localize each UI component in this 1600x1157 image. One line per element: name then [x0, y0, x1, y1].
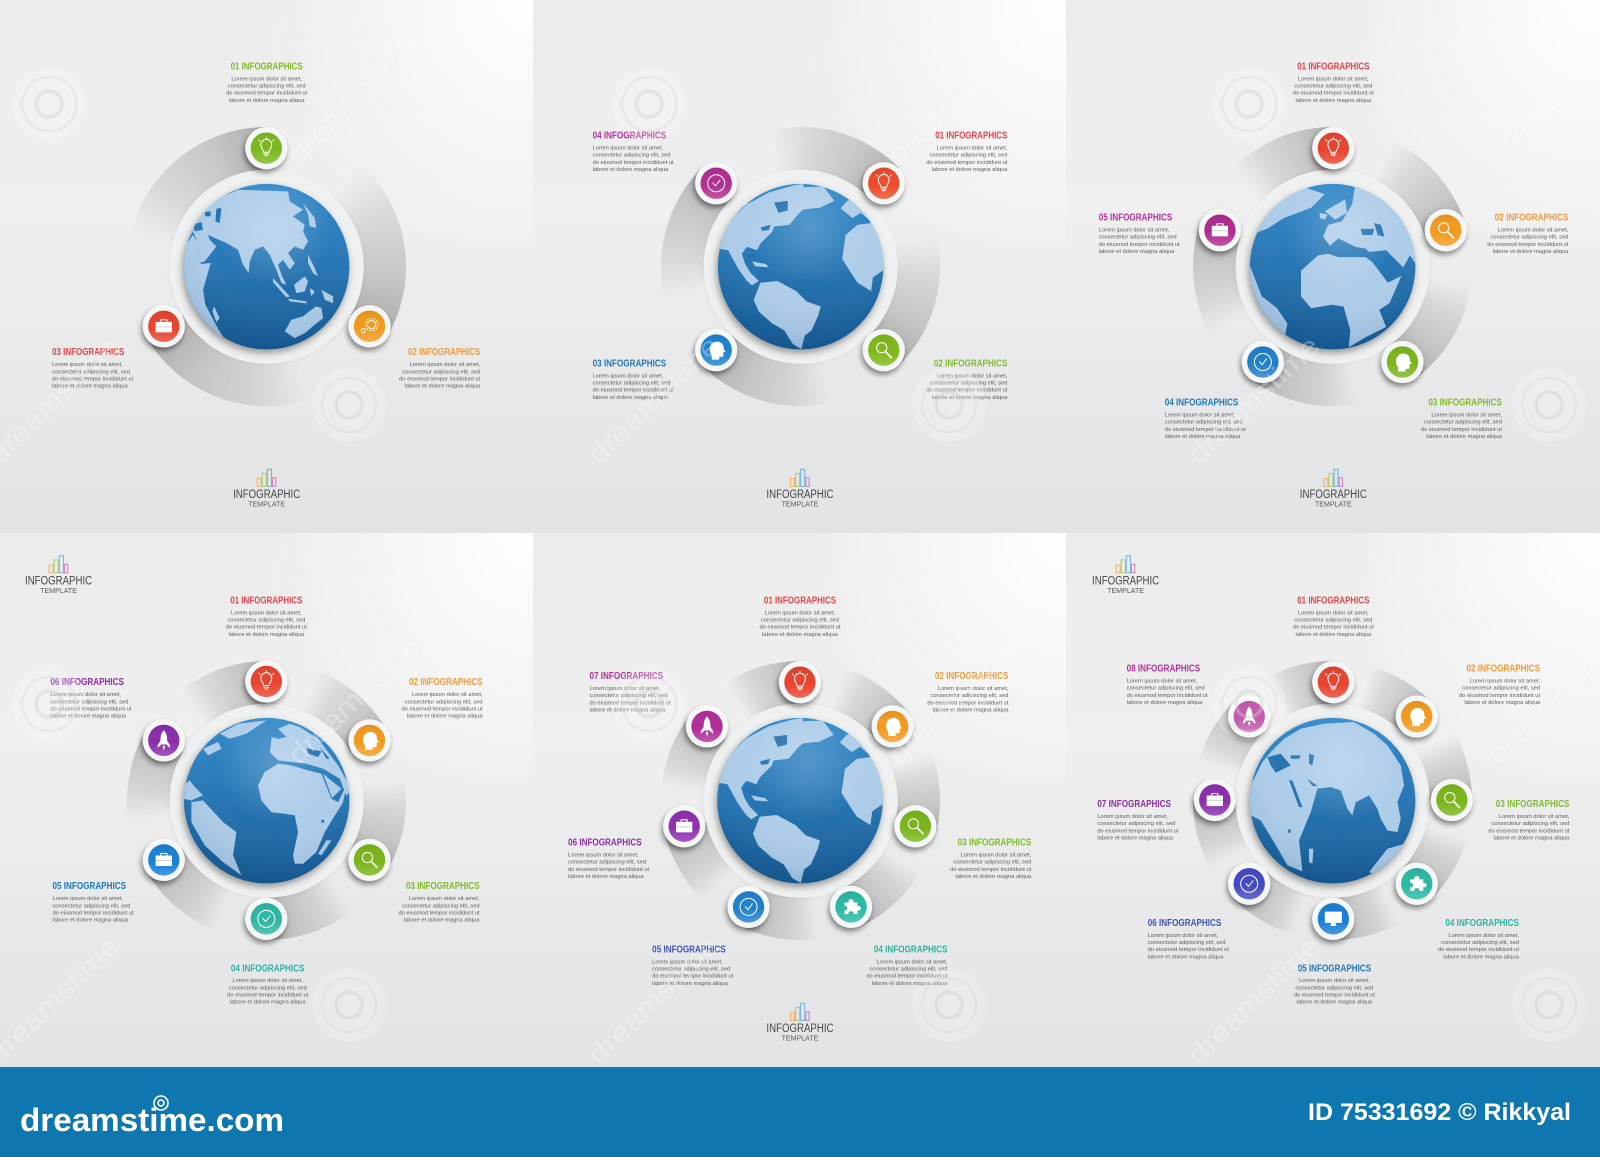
text: 03 — [52, 347, 134, 390]
footer band — [0, 1067, 1600, 1157]
text: 03 — [1421, 398, 1503, 440]
logo: TEMPLATE — [1107, 586, 1144, 595]
text: 04: do eiusmod tempor incididunt ut — [1165, 427, 1246, 433]
text: 04: Lorem ipsum dolor sit amet, — [593, 146, 664, 152]
node: 03 magnifier — [894, 805, 937, 847]
text: 03: 03 INFOGRAPHICS — [1496, 799, 1570, 810]
text: 04: do eiusmod tempor incididunt ut — [593, 160, 674, 166]
text: 06: do eiusmod tempor incididunt ut — [568, 867, 650, 873]
text: 07: labore et dolore magna aliqua — [590, 707, 666, 713]
ring band — [661, 661, 940, 940]
text: 04: 04 INFOGRAPHICS — [1165, 398, 1239, 409]
footer logo: dreamstime.com — [20, 1102, 284, 1138]
text: 05: 05 INFOGRAPHICS — [1099, 213, 1173, 224]
node: 08 rocket — [1228, 695, 1270, 738]
logo: INFOGRAPHIC — [1300, 489, 1367, 501]
text: 05: labore et dolore magna aliqua — [52, 918, 129, 924]
text: 05: consectetur adipiscing elit, sed — [1099, 235, 1177, 241]
text: 03: consectetur adipiscing elit, sed — [1424, 420, 1502, 426]
text: 01: labore et dolore magna aliqua — [932, 167, 1008, 173]
text: 03: labore et dolore magna aliqua — [593, 395, 669, 401]
text: 04: labore et dolore magna aliqua — [872, 981, 948, 987]
text: 02: 02 INFOGRAPHICS — [934, 358, 1008, 369]
text: 02 — [399, 347, 481, 390]
text: 08: 08 INFOGRAPHICS — [1127, 664, 1201, 675]
text: 06: do eiusmod tempor incididunt ut — [1148, 947, 1229, 953]
text: 02 — [1487, 213, 1569, 255]
node: 03 magnifier — [348, 839, 391, 881]
text: 01: Lorem ipsum dolor sit amet, — [1298, 76, 1369, 82]
ring band — [127, 127, 406, 406]
text: 07: labore et dolore magna aliqua — [1097, 835, 1174, 841]
text: 04: consectetur adipiscing elit, sed — [229, 985, 307, 991]
logo: TEMPLATE — [40, 586, 77, 595]
text: 04: 04 INFOGRAPHICS — [231, 963, 305, 974]
text: 02: Lorem ipsum dolor sit amet, — [1469, 678, 1540, 684]
text: 02: Lorem ipsum dolor sit amet, — [937, 373, 1008, 379]
node: 03 briefcase — [143, 305, 185, 347]
text: 05: Lorem ipsum dolor sit amet, — [1299, 978, 1370, 984]
text: 01 — [926, 131, 1008, 173]
node: 05 clock — [727, 886, 770, 928]
text: 01 — [1293, 61, 1374, 104]
text: 01: 01 INFOGRAPHICS — [1297, 61, 1370, 72]
text: 02 — [402, 677, 483, 720]
node: 03 head — [1381, 341, 1424, 383]
text: 07: do eiusmod tempor incididunt ut — [590, 700, 671, 706]
node: 06 clock — [1228, 863, 1270, 905]
text: 01: labore et dolore magna aliqua — [1296, 98, 1372, 104]
text: 03: do eiusmod tempor incididunt ut — [1488, 828, 1570, 834]
panel: three-item globe infographic — [0, 0, 533, 534]
text: 01: consectetur adipiscing elit, sed — [228, 84, 306, 90]
globe: Americas — [718, 184, 885, 349]
text: 03: Lorem ipsum dolor sit amet, — [1499, 814, 1570, 820]
text: 01: labore et dolore magna aliqua — [229, 98, 305, 104]
watermark overlay: dreamstime — [882, 30, 1025, 170]
node: 02 gear — [348, 305, 391, 347]
text: 04: labore et dolore magna aliqua — [1165, 434, 1241, 440]
text: 01: do eiusmod tempor incididunt ut — [226, 625, 307, 631]
node: 05 briefcase — [1199, 209, 1241, 251]
text: 01: Lorem ipsum dolor sit amet, — [231, 610, 302, 616]
text: 02 — [927, 671, 1009, 713]
node: 04 clock — [1242, 341, 1284, 383]
text: 06: labore et dolore magna aliqua — [1148, 954, 1224, 960]
text: 03 — [1488, 799, 1570, 841]
text: 02: do eiusmod tempor incididunt ut — [1487, 242, 1569, 248]
ring band — [127, 661, 406, 940]
logo: TEMPLATE — [782, 1033, 818, 1042]
text: 03: labore et dolore magna aliqua — [1426, 434, 1503, 440]
text: 01: consectetur adipiscing elit, sed — [1294, 84, 1372, 90]
text: 01 — [226, 61, 308, 104]
text: 04: consectetur adipiscing elit, sed — [593, 153, 670, 159]
text: 07: do eiusmod tempor incididunt ut — [1097, 828, 1179, 834]
text: 04: do eiusmod tempor incididunt ut — [227, 992, 309, 998]
ring band — [1193, 127, 1472, 406]
ring band — [661, 127, 940, 406]
text: 04: labore et dolore magna aliqua — [1443, 954, 1520, 960]
text: 02: labore et dolore magna aliqua — [405, 384, 481, 390]
text: 02: consectetur adipiscing elit, sed — [929, 380, 1007, 386]
text: 01: 01 INFOGRAPHICS — [1297, 595, 1370, 606]
text: 03: Lorem ipsum dolor sit amet, — [52, 362, 123, 368]
logo: TEMPLATE — [782, 499, 818, 508]
text: 07: 07 INFOGRAPHICS — [1097, 799, 1171, 810]
text: 03: labore et dolore magna aliqua — [956, 874, 1032, 880]
text: 01: consectetur adipiscing elit, sed — [227, 618, 305, 624]
text: 04: 04 INFOGRAPHICS — [1445, 918, 1519, 929]
text: 03: 03 INFOGRAPHICS — [52, 347, 125, 358]
node: 07 briefcase — [1194, 779, 1236, 821]
globe: Africa and India — [1247, 718, 1417, 883]
node: 02 magnifier — [863, 329, 905, 371]
text: 03: do eiusmod tempor incididunt ut — [52, 376, 134, 382]
text: 01: do eiusmod tempor incididunt ut — [1293, 625, 1374, 631]
text: 03: Lorem ipsum dolor sit amet, — [1431, 413, 1502, 419]
text: 05: labore et dolore magna aliqua — [1099, 249, 1175, 255]
footer credit: ID 75331692 © Rikkyal — [1308, 1099, 1571, 1126]
text: 01: consectetur adipiscing elit, sed — [1294, 618, 1372, 624]
watermark overlay: dreamstime — [282, 30, 425, 170]
text: 04 — [1165, 398, 1246, 440]
node: 05 monitor — [1312, 898, 1354, 940]
text: 04: consectetur adipiscing elit, sed — [1441, 940, 1519, 946]
text: 05: 05 INFOGRAPHICS — [52, 881, 126, 892]
text: 05: do eiusmod tempor incididunt ut — [1099, 242, 1180, 248]
text: 02 — [926, 358, 1008, 401]
panel: seven-item globe infographic — [533, 533, 1066, 1067]
text: 03: consectetur adipiscing elit, sed — [593, 380, 670, 386]
text: 01 — [226, 595, 307, 638]
logo — [233, 469, 300, 508]
text: 03: do eiusmod tempor incididunt ut — [398, 910, 480, 916]
text: 03: 03 INFOGRAPHICS — [593, 358, 666, 369]
node: 01 bulb — [245, 127, 287, 169]
text: 06: 06 INFOGRAPHICS — [568, 838, 642, 849]
panel artwork — [25, 555, 483, 1006]
text: 01: Lorem ipsum dolor sit amet, — [765, 610, 836, 616]
text: 02: do eiusmod tempor incididunt ut — [402, 706, 483, 712]
text: 08: Lorem ipsum dolor sit amet, — [1127, 678, 1198, 684]
text: 01: 01 INFOGRAPHICS — [231, 61, 303, 72]
text: 05: labore et dolore magna aliqua — [1297, 1000, 1373, 1006]
node: 06 rocket — [143, 719, 185, 761]
node: 01 bulb — [779, 661, 821, 703]
text: 02: consectetur adipiscing elit, sed — [1462, 686, 1540, 692]
logo — [766, 1003, 834, 1042]
text: 02: labore et dolore magna aliqua — [407, 714, 483, 720]
text: 02: 02 INFOGRAPHICS — [1495, 213, 1569, 224]
text: 04 — [1438, 918, 1520, 960]
text: 02: Lorem ipsum dolor sit amet, — [412, 692, 483, 698]
text: 04: Lorem ipsum dolor sit amet, — [1165, 413, 1236, 419]
text: 07: consectetur adipiscing elit, sed — [1097, 821, 1175, 827]
text: 02: consectetur adipiscing elit, sed — [931, 693, 1008, 699]
logo: TEMPLATE — [1315, 499, 1352, 508]
node: 02 head — [871, 705, 914, 748]
panel: eight-item globe infographic — [1066, 533, 1600, 1067]
text: 01: 01 INFOGRAPHICS — [230, 595, 303, 606]
text: 01: do eiusmod tempor incididunt ut — [1293, 91, 1374, 97]
logo: INFOGRAPHIC — [233, 489, 300, 501]
text: 02: labore et dolore magna aliqua — [932, 395, 1008, 401]
text: 07: consectetur adipiscing elit, sed — [590, 693, 667, 699]
text: 03: labore et dolore magna aliqua — [404, 918, 480, 924]
text: 03: consectetur adipiscing elit, sed — [52, 369, 130, 375]
text: 01: 01 INFOGRAPHICS — [935, 131, 1008, 142]
text: 04: Lorem ipsum dolor sit amet, — [877, 959, 948, 965]
text: 07 — [1097, 799, 1179, 841]
watermark overlay: dreamstime — [582, 330, 725, 470]
text: 07: Lorem ipsum dolor sit amet, — [590, 686, 660, 692]
text: 06: labore et dolore magna aliqua — [568, 874, 645, 880]
text: 05: Lorem ipsum dolor sit amet, — [1099, 228, 1170, 234]
text: 03: 03 INFOGRAPHICS — [1428, 398, 1502, 409]
text: 02: labore et dolore magna aliqua — [1464, 700, 1541, 706]
logo: INFOGRAPHIC — [25, 575, 92, 587]
text: 02: Lorem ipsum dolor sit amet, — [1498, 228, 1569, 234]
watermark overlay: dreamstime — [1182, 930, 1325, 1070]
logo: INFOGRAPHIC — [766, 489, 834, 501]
logo: INFOGRAPHIC — [1092, 575, 1159, 587]
inner ring — [1236, 170, 1430, 364]
panel artwork — [1099, 61, 1569, 508]
text: 02: do eiusmod tempor incididunt ut — [927, 700, 1009, 706]
panel artwork — [568, 595, 1032, 1042]
text: 01 — [1293, 595, 1374, 638]
text: 01: do eiusmod tempor incididunt ut — [226, 91, 308, 97]
text: 03: Lorem ipsum dolor sit amet, — [961, 853, 1032, 859]
text: 05 — [1099, 213, 1180, 255]
text: 01: labore et dolore magna aliqua — [228, 632, 305, 638]
text: 02: 02 INFOGRAPHICS — [409, 677, 483, 688]
text: 04 — [866, 945, 948, 987]
text: 05: do eiusmod tempor incididunt ut — [1294, 992, 1375, 998]
panel: five-item globe infographic — [1066, 0, 1600, 534]
text: 03: labore et dolore magna aliqua — [52, 384, 129, 390]
text: 01: consectetur adipiscing elit, sed — [761, 618, 839, 624]
text: 02: Lorem ipsum dolor sit amet, — [410, 362, 481, 368]
text: 05: consectetur adipiscing elit, sed — [52, 903, 130, 909]
text: 05: do eiusmod tempor incididunt ut — [652, 974, 734, 980]
text: 04 — [593, 131, 674, 173]
text: 05 — [1294, 963, 1375, 1006]
text: 01: labore et dolore magna aliqua — [762, 632, 839, 638]
node: 04 puzzle — [830, 886, 872, 928]
text: 03: Lorem ipsum dolor sit amet, — [409, 896, 480, 902]
inner ring — [704, 170, 898, 364]
node: 02 head — [348, 719, 391, 761]
text: 05: 05 INFOGRAPHICS — [652, 945, 726, 956]
text: 02: consectetur adipiscing elit, sed — [402, 369, 480, 375]
text: 01: labore et dolore magna aliqua — [1296, 632, 1372, 638]
text: 05: Lorem ipsum dolor sit amet, — [52, 896, 123, 902]
text: 08 — [1127, 664, 1208, 706]
logo — [766, 469, 834, 508]
text: 03: consectetur adipiscing elit, sed — [1491, 821, 1569, 827]
text: 06: consectetur adipiscing elit, sed — [1148, 940, 1226, 946]
watermark overlay: dreamstime — [582, 930, 725, 1070]
text: 01 — [759, 595, 841, 638]
node: 07 rocket — [686, 705, 728, 748]
text: 01: Lorem ipsum dolor sit amet, — [937, 146, 1008, 152]
node: 04 clock — [245, 898, 287, 940]
inner ring — [704, 704, 898, 898]
node: 04 clock — [695, 162, 737, 204]
text: 04: 04 INFOGRAPHICS — [874, 945, 948, 956]
text: 02: do eiusmod tempor incididunt ut — [399, 376, 481, 382]
node: 03 head — [695, 329, 737, 371]
text: 04: do eiusmod tempor incididunt ut — [1438, 947, 1519, 953]
text: 05: do eiusmod tempor incididunt ut — [52, 910, 134, 916]
node: 05 briefcase — [143, 839, 185, 881]
text: 03: do eiusmod tempor incididunt ut — [950, 867, 1032, 873]
text: 07: Lorem ipsum dolor sit amet, — [1097, 814, 1168, 820]
text: 07: 07 INFOGRAPHICS — [590, 671, 663, 682]
text: 06 — [1148, 918, 1229, 960]
text: 02: consectetur adipiscing elit, sed — [1490, 235, 1568, 241]
text: 05 — [652, 945, 734, 987]
text: 04: consectetur adipiscing elit, sed — [870, 967, 947, 973]
text: 06: Lorem ipsum dolor sit amet, — [568, 853, 639, 859]
text: 01: do eiusmod tempor incididunt ut — [926, 160, 1008, 166]
text: 08: consectetur adipiscing elit, sed — [1127, 686, 1205, 692]
text: 03: 03 INFOGRAPHICS — [958, 838, 1032, 849]
text: 06 — [50, 677, 132, 720]
text: 02: do eiusmod tempor incididunt ut — [1459, 693, 1540, 699]
node: 02 magnifier — [1425, 209, 1467, 251]
text: 05: consectetur adipiscing elit, sed — [1295, 985, 1373, 991]
logo — [25, 556, 92, 595]
text: 06: 06 INFOGRAPHICS — [50, 677, 124, 688]
watermark overlay: dreamstime — [882, 630, 1025, 770]
node: 03 magnifier — [1431, 779, 1473, 821]
panel artwork — [1092, 555, 1570, 1006]
text: 04: labore et dolore magna aliqua — [230, 1000, 306, 1006]
text: 05: consectetur adipiscing elit, sed — [652, 967, 730, 973]
text: 05 — [52, 881, 134, 924]
text: 02: 02 INFOGRAPHICS — [1467, 664, 1540, 675]
text: 05: Lorem ipsum dolor sit amet, — [652, 959, 723, 965]
panel: six-item globe infographic — [0, 533, 533, 1067]
text: 03 — [398, 881, 480, 924]
watermark overlay: dreamstime — [1182, 330, 1325, 470]
text: 03 — [593, 358, 674, 401]
text: 01: Lorem ipsum dolor sit amet, — [231, 76, 302, 82]
ring band — [1193, 661, 1472, 940]
text: 08: do eiusmod tempor incididunt ut — [1127, 693, 1208, 699]
logo — [1092, 556, 1159, 595]
node: 06 briefcase — [663, 805, 705, 847]
text: 04: Lorem ipsum dolor sit amet, — [1448, 933, 1519, 939]
text: 06: consectetur adipiscing elit, sed — [568, 860, 646, 866]
text: 05: 05 INFOGRAPHICS — [1298, 963, 1371, 974]
text: 06: do eiusmod tempor incididunt ut — [50, 706, 132, 712]
inner ring — [170, 170, 364, 364]
text: 03: consectetur adipiscing elit, sed — [953, 860, 1031, 866]
node: 01 bulb — [1312, 661, 1354, 703]
text: 06: labore et dolore magna aliqua — [50, 714, 127, 720]
text: 03: consectetur adipiscing elit, sed — [402, 903, 480, 909]
text: 06: Lorem ipsum dolor sit amet, — [50, 692, 121, 698]
panel artwork — [592, 131, 1008, 508]
globe: Atlantic and Africa — [183, 718, 351, 883]
globe: Europe and Africa — [1250, 184, 1420, 349]
text: 06: 06 INFOGRAPHICS — [1148, 918, 1222, 929]
text: 03: 03 INFOGRAPHICS — [406, 881, 480, 892]
watermark overlay: dreamstime — [282, 630, 425, 770]
panel: four-item globe infographic — [533, 0, 1066, 534]
text: 02: 02 INFOGRAPHICS — [408, 347, 481, 358]
globe: Asia — [181, 184, 349, 349]
text: 02: consectetur adipiscing elit, sed — [405, 699, 483, 705]
text: 03: labore et dolore magna aliqua — [1494, 835, 1570, 841]
logo: INFOGRAPHIC — [766, 1023, 834, 1035]
node: 01 bulb — [245, 660, 287, 703]
node: 01 bulb — [1312, 127, 1354, 169]
text: 03 — [950, 838, 1032, 880]
text: 04: consectetur adipiscing elit, sed — [1165, 420, 1243, 426]
globe: Americas — [717, 718, 884, 883]
text: 04: labore et dolore magna aliqua — [593, 167, 669, 173]
node: 01 bulb — [863, 162, 905, 204]
inner ring — [1236, 704, 1430, 898]
text: 03: do eiusmod tempor incididunt ut — [1421, 427, 1502, 433]
text: 02: do eiusmod tempor incididunt ut — [926, 388, 1008, 394]
logo: TEMPLATE — [248, 499, 285, 508]
panel artwork — [52, 61, 481, 508]
text: 06 — [568, 838, 650, 880]
text: 01: consectetur adipiscing elit, sed — [929, 153, 1007, 159]
text: 04: do eiusmod tempor incididunt ut — [866, 974, 948, 980]
logo — [1300, 469, 1367, 508]
node: 04 puzzle — [1396, 863, 1438, 905]
node: 02 head — [1396, 695, 1438, 738]
text: 02: labore et dolore magna aliqua — [1493, 249, 1569, 255]
text: 01: Lorem ipsum dolor sit amet, — [1298, 610, 1369, 616]
text: 03: Lorem ipsum dolor sit amet, — [593, 373, 664, 379]
text: 04 — [227, 963, 309, 1006]
text: 02: 02 INFOGRAPHICS — [935, 671, 1009, 682]
text: 08: labore et dolore magna aliqua — [1127, 700, 1203, 706]
text: 02 — [1459, 664, 1541, 706]
text: 06: consectetur adipiscing elit, sed — [50, 699, 128, 705]
text: 02: labore et dolore magna aliqua — [933, 707, 1009, 713]
text: 05: labore et dolore magna aliqua — [652, 981, 729, 987]
text: 04: Lorem ipsum dolor sit amet, — [232, 978, 303, 984]
text: 03: do eiusmod tempor incididunt ut — [593, 388, 674, 394]
text: 01: 01 INFOGRAPHICS — [764, 595, 836, 606]
text: 02: Lorem ipsum dolor sit amet, — [938, 686, 1009, 692]
text: 04: 04 INFOGRAPHICS — [593, 131, 666, 142]
text: 01: do eiusmod tempor incididunt ut — [759, 625, 841, 631]
text: 06: Lorem ipsum dolor sit amet, — [1148, 933, 1219, 939]
text: 07 — [590, 671, 671, 713]
inner ring — [170, 704, 364, 898]
